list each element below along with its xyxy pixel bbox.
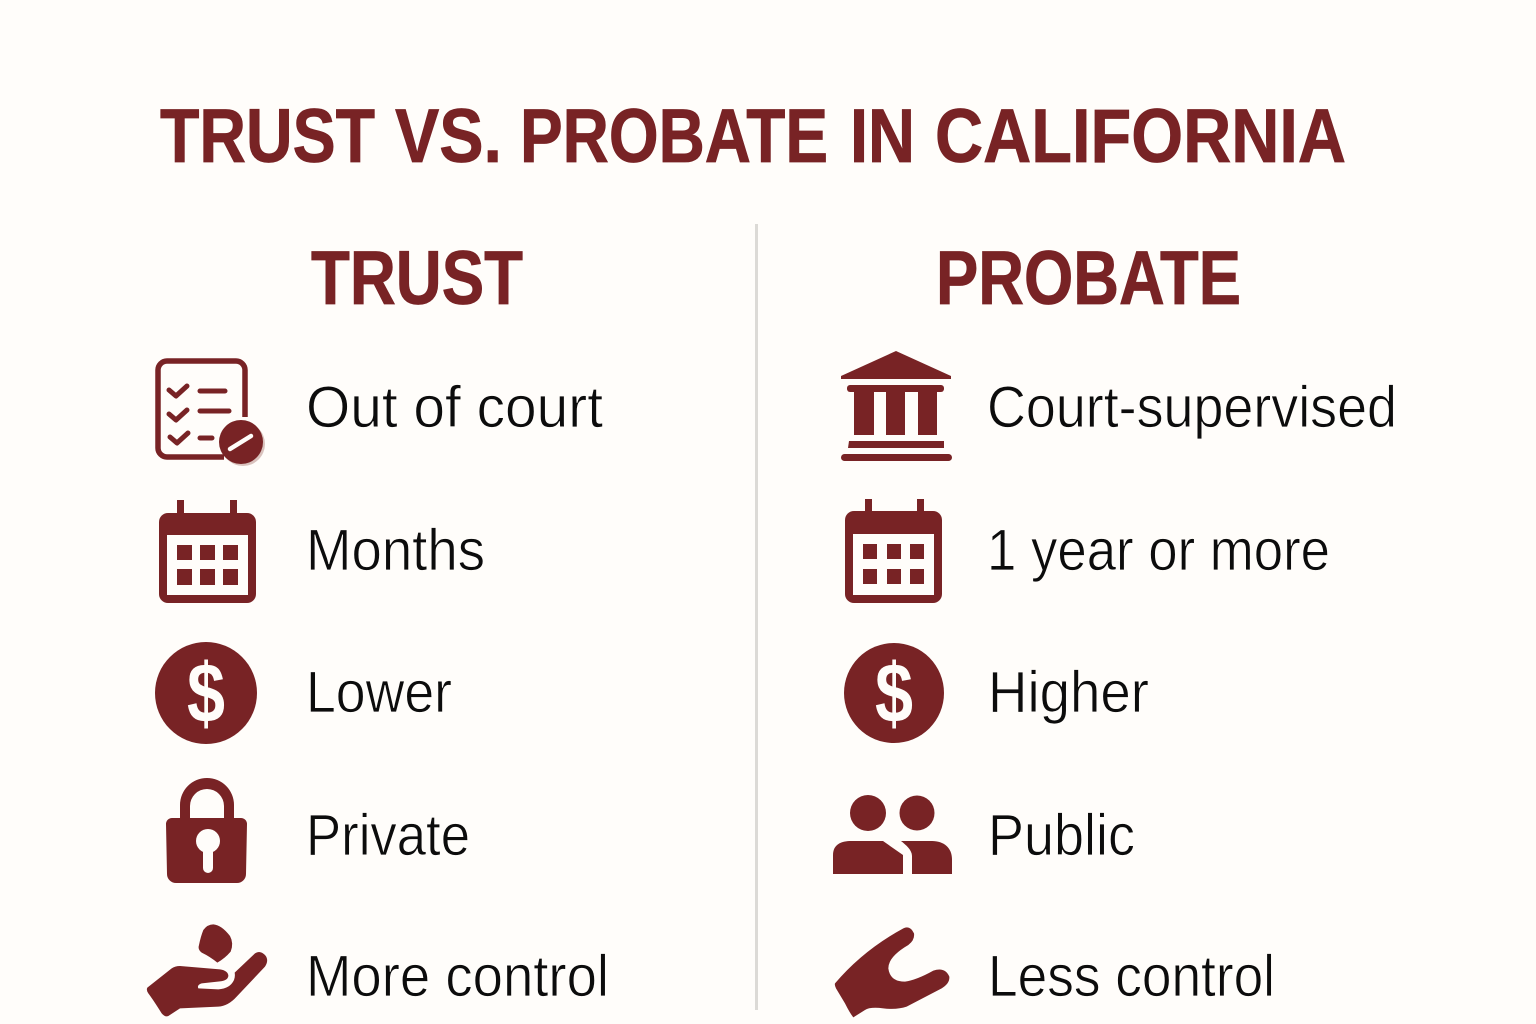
text: months: Months [306,518,485,583]
text: lower: Lower [306,660,452,725]
icon: dollar coin [155,642,257,744]
title: TRUST [160,94,375,179]
text: less control: Less control [988,944,1275,1009]
text: more control: More control [306,944,609,1009]
title: PROBATE [520,94,828,179]
icon: calendar [845,499,942,603]
icon: open hand [835,927,949,1017]
title: IN [850,94,915,179]
title [160,94,1346,179]
panel: trust column [147,236,609,1016]
text: 1 year or more: 1 year or more [987,518,1330,583]
icon: dollar coin [844,643,944,743]
icon: two people [833,795,952,874]
icon: checklist with badge [158,361,265,466]
title: CALIFORNIA [935,94,1346,179]
text: public: Public [988,803,1135,868]
text: out of court: Out of court [306,375,603,440]
panel: probate column [833,236,1397,1017]
icon: hand holding drop [147,924,267,1016]
heading: trust: TRUST [311,236,523,321]
text: court-supervised: Court-supervised [987,375,1397,440]
text: private: Private [306,803,470,868]
text: higher: Higher [988,660,1149,725]
icon: dollar coin: $ [187,646,225,740]
icon: courthouse [841,351,952,461]
title: VS. [395,94,502,179]
icon: dollar coin: $ [875,646,913,740]
icon: padlock [166,778,247,883]
icon: calendar [159,500,256,603]
heading: probate: PROBATE [936,236,1241,321]
